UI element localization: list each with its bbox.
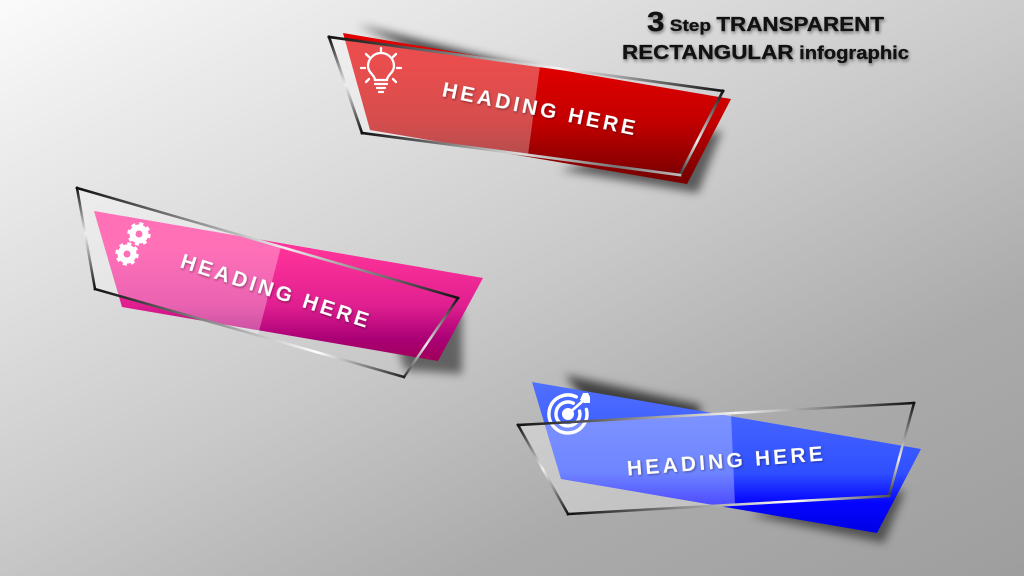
red metallic frame xyxy=(329,37,723,175)
title: RECTANGULAR infographic xyxy=(622,42,909,64)
pink heading: HEADING HERE xyxy=(178,250,374,334)
red panel shadows xyxy=(358,25,722,193)
icon: gears xyxy=(117,224,149,264)
panel: pink step xyxy=(77,188,483,377)
pink panel shape xyxy=(94,211,483,361)
red panel shape xyxy=(343,33,731,184)
title xyxy=(622,6,909,64)
pink glass highlight xyxy=(77,188,281,335)
blue glass highlight xyxy=(518,413,735,514)
panel: blue step xyxy=(518,375,921,543)
blue heading: HEADING HERE xyxy=(626,442,827,481)
panel: red step xyxy=(329,25,731,193)
blue panel shape xyxy=(532,382,921,533)
icon: target with arrow xyxy=(549,393,590,433)
blue metallic frame xyxy=(518,403,914,514)
red heading: HEADING HERE xyxy=(440,78,640,141)
icon: light bulb xyxy=(361,48,401,92)
pink metallic frame xyxy=(77,188,458,377)
red glass highlight xyxy=(329,37,540,155)
blue panel shadows xyxy=(565,375,905,543)
title: 3 Step TRANSPARENT xyxy=(647,6,884,37)
pink panel shadow xyxy=(380,290,462,374)
